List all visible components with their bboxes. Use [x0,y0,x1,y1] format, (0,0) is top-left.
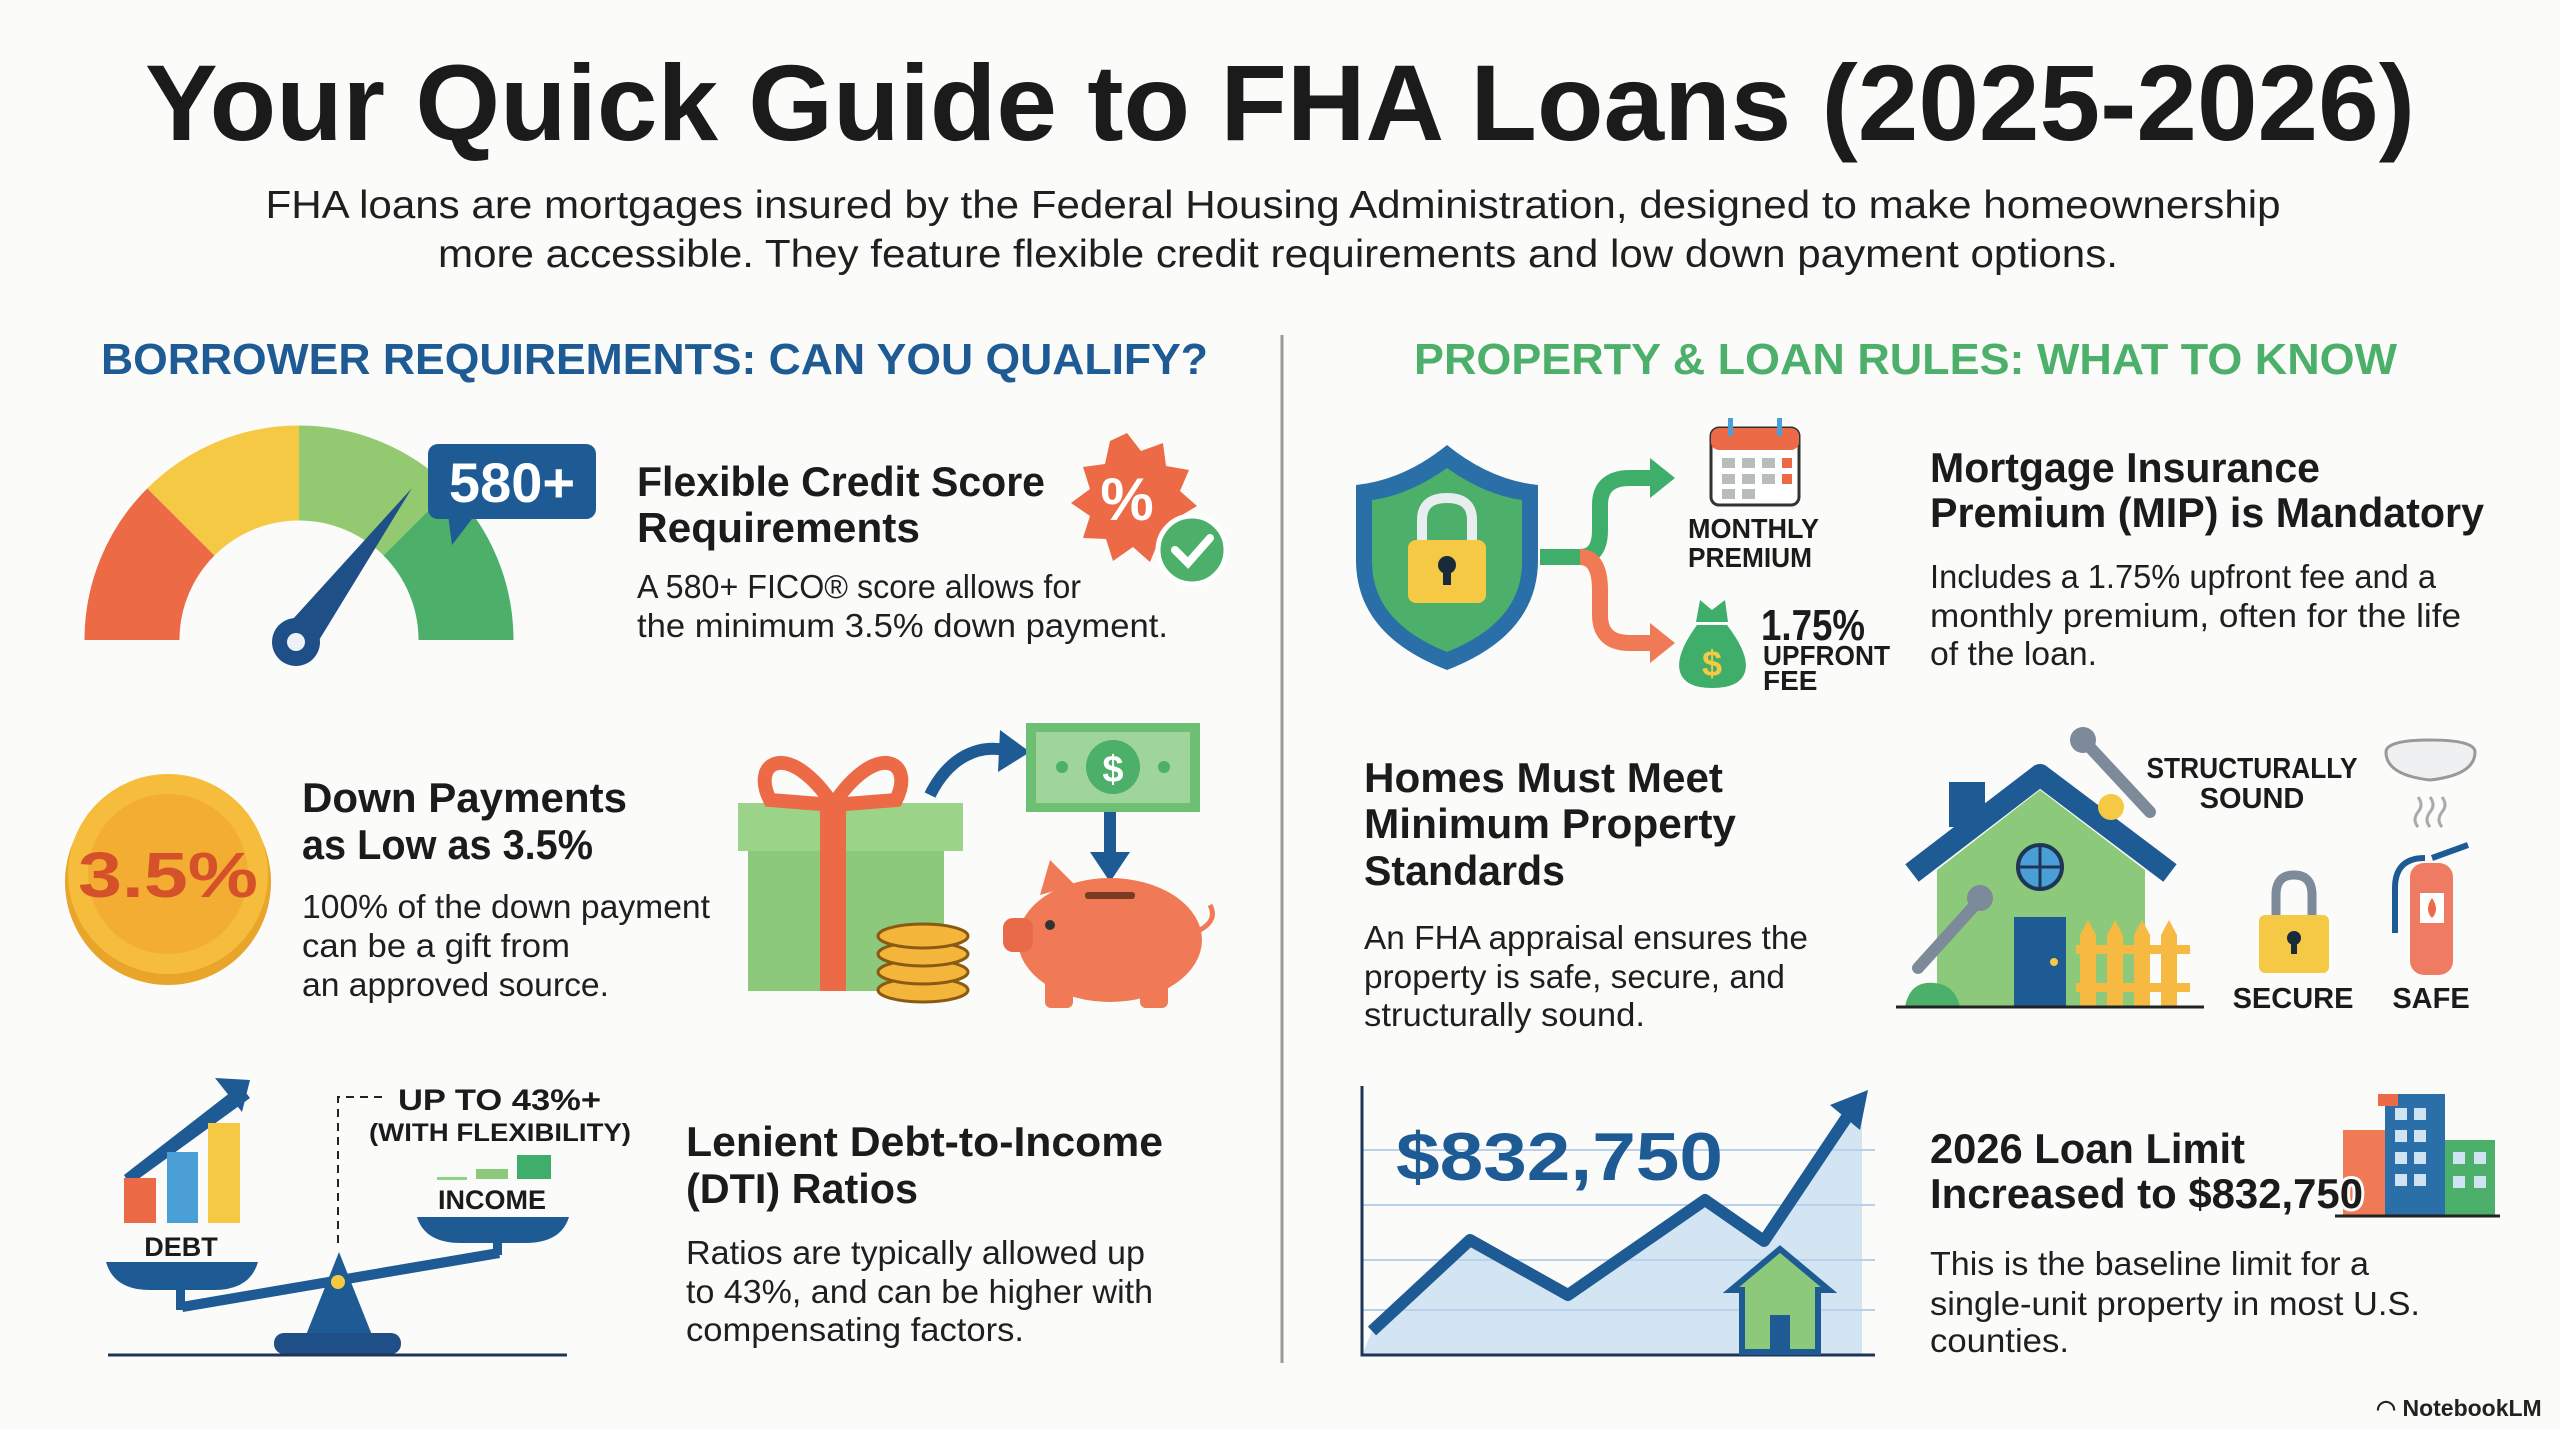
badge: 580+ [428,444,596,545]
text: DTI: Lenient Debt-to-Income [686,1118,1163,1165]
label: 1.75% upfront fee: FEE [1763,665,1817,696]
icon: money bag [1679,600,1746,688]
text: DTI: compensating factors. [686,1311,1024,1348]
text: down payments [302,774,710,1003]
label: monthly premium: MONTHLY [1688,513,1819,544]
text: down payments: an approved source. [302,966,609,1003]
label: structurally sound: STRUCTURALLY [2146,753,2358,785]
icon: debt/income scale: DEBT [144,1232,218,1262]
icon: percent badge with check: % [1100,466,1154,533]
text: down payments: can be a gift from [302,927,570,964]
text: down payments: 100% of the down payment [302,888,710,925]
text: loan limit: This is the baseline limit for a [1930,1245,2370,1282]
icon: coin stack [878,924,968,1002]
icon: percent badge with check [1071,433,1226,584]
text: property standards: Minimum Property [1364,800,1737,847]
icon: calendar [1711,418,1799,505]
icon: smoke detector [2386,740,2475,827]
text: DTI: Ratios are typically allowed up [686,1234,1145,1271]
arrows: split to premiums [1540,458,1675,663]
label: 1.75% upfront fee: UPFRONT [1763,640,1890,671]
icon: buildings [2335,1094,2500,1216]
subtitle: FHA loans are mortgages insured by the Federal Housing Administration, designed to make homeownership [266,184,2280,227]
text: flexible credit score: Flexible Credit Score [637,458,1045,505]
label: structurally sound [2146,753,2358,815]
text: loan limit: counties. [1930,1322,2069,1359]
label: 1.75% upfront fee: 1.75% [1761,601,1865,650]
text: MIP: monthly premium, often for the life [1930,597,2461,634]
arrow: bill to piggy [1090,812,1130,882]
text: loan limit: single-unit property in most U.S. [1930,1285,2420,1322]
text: property standards: An FHA appraisal ensures the [1364,919,1808,956]
icon: credit gauge [132,473,466,666]
watermark: NotebookLM: ◠ NotebookLM [2376,1395,2542,1421]
icon: dollar bill: $ [1102,749,1124,791]
text: DTI: (DTI) Ratios [686,1165,918,1212]
text: loan limit: Increased to $832,750 [1930,1170,2363,1217]
text: flexible credit score: A 580+ FICO® score allows for [637,568,1081,605]
icon: coin 3.5% [65,774,271,985]
text: DTI: to 43%, and can be higher with [686,1273,1153,1310]
text: MIP: of the loan. [1930,635,2097,672]
text: MIP [1930,444,2485,672]
text: loan limit [1930,1125,2420,1359]
text: flexible credit score: the minimum 3.5% down payment. [637,607,1168,644]
icon: house with tools [1896,727,2204,1007]
text: flexible credit score [637,458,1168,644]
text: property standards: Standards [1364,847,1565,894]
icon: padlock secure [2233,875,2353,1015]
icon: coin 3.5%: 3.5% [78,839,258,911]
label: structurally sound: SOUND [2200,783,2304,815]
icon: debt/income scale: INCOME [438,1185,546,1215]
text: property standards [1364,754,1808,1033]
text: property standards: property is safe, secure, and [1364,958,1785,995]
subtitle: more accessible. They feature flexible credit requirements and low down payment options. [438,233,2118,276]
icon: fire extinguisher safe [2392,845,2470,1015]
icon: fire extinguisher safe: SAFE [2392,983,2470,1015]
label: monthly premium: PREMIUM [1688,542,1812,573]
text: MIP: Premium (MIP) is Mandatory [1930,489,2485,536]
text: property standards: Homes Must Meet [1364,754,1723,801]
subtitle [266,184,2280,276]
icon: padlock secure: SECURE [2233,983,2353,1015]
text: down payments: as Low as 3.5% [302,821,593,868]
text: property standards: structurally sound. [1364,996,1645,1033]
text: flexible credit score: Requirements [637,504,920,551]
chart: loan limit growth: $832,750 [1396,1119,1723,1195]
icon: debt/income scale: UP TO 43%+ [398,1084,601,1117]
badge: 580+: 580+ [449,451,575,514]
icon: piggy bank [1003,860,1212,1008]
icon: dollar bill [1026,723,1200,812]
text: MIP: Includes a 1.75% upfront fee and a [1930,558,2437,595]
icon: money bag: $ [1702,643,1722,684]
label: monthly premium [1688,513,1819,573]
text: down payments: Down Payments [302,774,627,821]
label: 1.75% upfront fee [1761,601,1890,696]
heading: property & loan rules: PROPERTY & LOAN RULES: WHAT TO KNOW [1414,335,2397,384]
icon: gift box [738,763,963,991]
arrow: gift to bill [930,730,1030,795]
icon: debt/income scale [106,1078,631,1355]
chart: loan limit growth [1362,1086,1875,1355]
title: Your Quick Guide to FHA Loans (2025-2026) [145,42,2415,163]
text: MIP: Mortgage Insurance [1930,444,2320,491]
text: loan limit: 2026 Loan Limit [1930,1125,2245,1172]
heading: borrower requirements: BORROWER REQUIREMENTS: CAN YOU QUALIFY? [101,335,1208,384]
text: DTI [686,1118,1163,1348]
icon: shield with lock [1356,445,1538,670]
icon: debt/income scale: (WITH FLEXIBILITY) [369,1119,631,1147]
